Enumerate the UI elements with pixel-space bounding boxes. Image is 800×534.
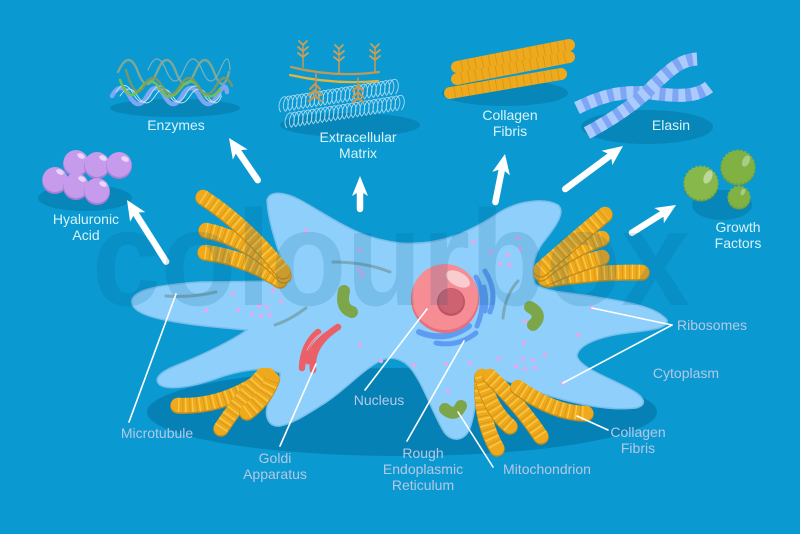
icon: growth factors xyxy=(684,150,756,210)
arrow: to enzymes xyxy=(222,133,265,185)
collagen bundle: top right xyxy=(541,214,642,280)
label: collagen fibris: Collagen xyxy=(482,107,538,123)
label: hyaluronic acid: Acid xyxy=(72,227,100,243)
label: extracellular matrix: Extracellular xyxy=(319,129,397,145)
label: collagen fibris lower: Fibris xyxy=(621,440,655,456)
label: cytoplasm: Cytoplasm xyxy=(653,365,719,381)
microtubules xyxy=(166,262,518,325)
leader lines xyxy=(129,294,672,467)
collagen bundle: bottom left xyxy=(178,375,272,429)
coils xyxy=(279,79,404,128)
collagen bundle: bottom right xyxy=(482,376,586,449)
label: growth factors: Factors xyxy=(715,235,761,251)
matrix stems xyxy=(290,41,380,102)
nucleus xyxy=(411,264,479,333)
label: hyaluronic acid: Hyaluronic xyxy=(53,211,119,227)
label: microtubule: Microtubule xyxy=(121,425,193,441)
arrow: to elasin xyxy=(560,139,628,196)
label: rough endoplasmic reticulum: Rough xyxy=(402,445,444,461)
shadow: cell xyxy=(147,368,657,456)
label: mitochondrion: Mitochondrion xyxy=(503,461,591,477)
label: goldi apparatus: Goldi xyxy=(259,450,291,466)
shadow: collagen fibris xyxy=(442,80,568,106)
icon: enzymes xyxy=(112,59,232,104)
label: collagen fibris: Fibris xyxy=(493,123,527,139)
cell body xyxy=(132,193,667,439)
shadow: extracellular matrix xyxy=(280,113,420,137)
rough endoplasmic reticulum xyxy=(419,271,493,344)
arrow: to hyaluronic acid xyxy=(119,195,174,266)
label: nucleus: Nucleus xyxy=(354,392,404,408)
label: rough endoplasmic reticulum: Reticulum xyxy=(392,477,454,493)
arrow: to growth factors xyxy=(627,197,681,240)
mitochondrion: left xyxy=(343,291,352,312)
mitochondrion: bottom xyxy=(445,406,461,413)
arrow: to collagen fibris xyxy=(487,152,514,204)
label: growth factors: Growth xyxy=(715,219,761,235)
ribosomes xyxy=(204,229,594,393)
label: enzymes: Enzymes xyxy=(147,117,205,133)
shadow: enzymes xyxy=(110,99,240,117)
label: collagen fibris lower: Collagen xyxy=(610,424,666,440)
label: rough endoplasmic reticulum: Endoplasmic xyxy=(383,461,463,477)
icon: hyaluronic acid xyxy=(42,150,132,205)
icon: extracellular matrix xyxy=(279,41,404,128)
mitochondrion: right xyxy=(530,307,538,325)
shadow: elasin xyxy=(581,110,713,144)
icon: elasin xyxy=(577,59,709,133)
shadow: hyaluronic acid xyxy=(38,185,132,211)
arrow: to extracellular matrix xyxy=(352,176,368,209)
label: elasin: Elasin xyxy=(652,117,690,133)
label: extracellular matrix: Matrix xyxy=(339,145,377,161)
shadow: growth factors xyxy=(692,190,752,220)
icon: collagen fibris xyxy=(450,45,569,93)
watermark: colourbox xyxy=(92,182,690,334)
label: ribosomes: Ribosomes xyxy=(677,317,747,333)
collagen bundle: top left xyxy=(203,197,284,281)
label: goldi apparatus: Apparatus xyxy=(243,466,307,482)
goldi apparatus xyxy=(302,327,338,370)
